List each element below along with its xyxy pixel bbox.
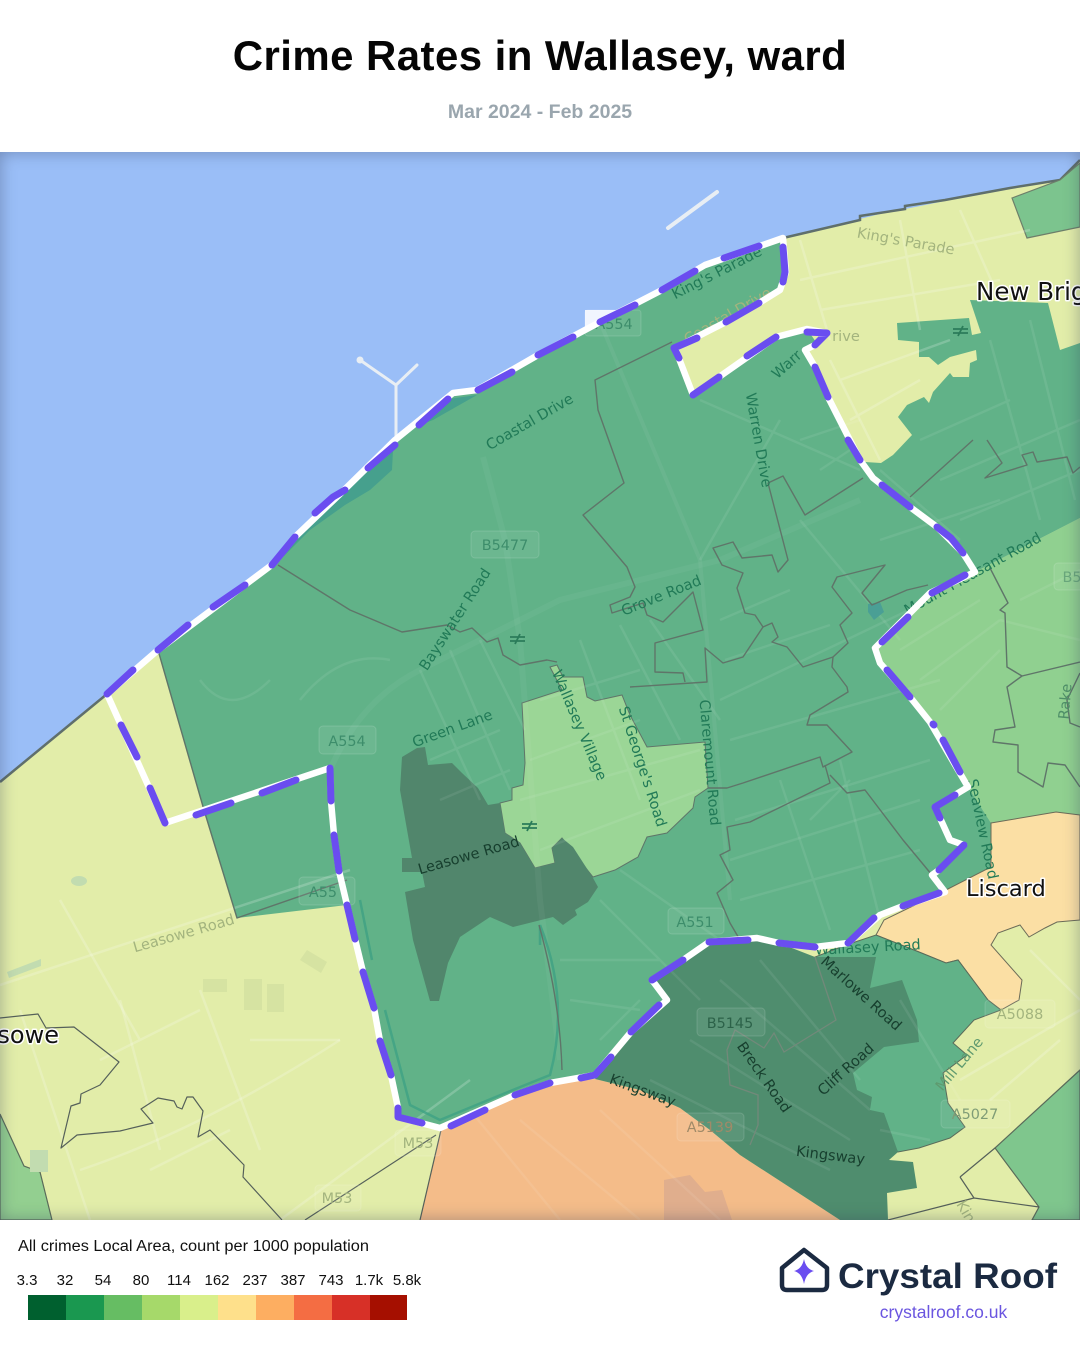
area: dark green south ward [595,938,919,1220]
road labels: Coastal Drive [681,284,774,348]
area: green south of Liscard [815,935,1001,1152]
place labels: Liscard [966,876,1046,902]
legend tick labels: 387 [280,1272,306,1289]
legend tick labels: 32 [57,1272,73,1289]
teal foreshore strips [277,395,884,620]
road labels: Rake [1055,683,1076,720]
road labels: Grove Road [619,572,704,620]
legend [17,1238,422,1320]
road labels [131,225,1076,1234]
road number badges: M53 [403,1136,433,1152]
road labels: Kingsway [607,1071,678,1111]
ward boundary dashed outline [107,238,975,1128]
road number badges: A5088 [997,1007,1043,1023]
icon: house with star [782,1250,827,1290]
road number badges: A554 [328,734,366,750]
land: low crime yellow areas [0,160,1080,1220]
legend tick labels: 743 [318,1272,344,1289]
area: light green east of ward [875,518,1080,823]
road labels: Mount Pleasant Road [901,529,1044,619]
road labels: King's Parade [669,243,765,303]
map panel [0,152,1080,1220]
legend tick labels: 114 [167,1272,191,1289]
legend tick labels: 5.8k [393,1272,422,1289]
streets network [0,210,1080,1220]
rail station icons [510,326,968,831]
sea [0,152,1080,1220]
road number badges: A55 [309,885,337,901]
road number badges: B5477 [482,538,528,554]
legend tick labels [17,1272,422,1289]
road number badges: A554 [595,317,633,333]
road labels: rive [832,328,860,345]
road labels: Kingsway [795,1143,866,1168]
road labels: Seaview Road [963,777,1001,881]
area boundaries [158,342,1080,1070]
legend tick labels: 80 [133,1272,149,1289]
area: main green region of ward and north east [158,238,1080,1128]
road number badges: M53 [322,1191,352,1207]
road labels: Bayswater Road [416,565,495,674]
road labels: Marlowe Road [817,953,905,1034]
area: top right park green [1012,163,1080,238]
road labels: Wallasey Road [814,936,921,959]
area: bottom right green [995,1070,1080,1220]
park water channel [360,900,558,1120]
legend tick labels: 3.3 [17,1272,37,1289]
map edge vignette [0,152,1080,1220]
coastline [0,160,1080,782]
area: orange high crime [420,1079,840,1220]
road labels: Warren Drive [742,392,775,489]
road number badges: A5139 [687,1120,733,1136]
area: dark green central [400,747,598,1001]
road labels: Green Lane [410,706,495,751]
road number badges [299,310,1080,1211]
road labels: Leasowe Road [416,833,521,878]
road number badges: A551 [676,915,714,931]
boundary inside dark south area [727,957,836,1145]
area: tan Liscard high crime [876,812,1080,1010]
road labels: Mill Lane [932,1034,987,1094]
small water and field features [7,876,327,1172]
road labels: Claremount Road [696,699,723,826]
road labels: Warr [769,347,805,382]
road labels: Breck Road [733,1039,794,1116]
boundaries west of ward [0,1014,1039,1220]
road labels: Coastal Drive [483,390,576,454]
patch inside orange area [664,1175,732,1220]
legend tick labels: 1.7k [355,1272,384,1289]
logo: Crystal Roof [780,1248,1058,1322]
structure in the sea [357,192,717,438]
legend tick labels: 162 [204,1272,230,1289]
road labels: Leasowe Road [131,911,236,956]
road labels: Cliff Road [814,1040,878,1099]
road number badges: B5145 [707,1016,753,1032]
subtitle: date range: Mar 2024 - Feb 2025 [448,101,632,123]
legend title: All crimes Local Area, count per 1000 population [18,1238,369,1255]
logo wordmark: Crystal Roof [838,1257,1057,1296]
legend tick labels: 237 [242,1272,268,1289]
legend tick labels: 54 [95,1272,111,1289]
website url: crystalroof.co.uk [880,1302,1007,1322]
road number badges: A5027 [952,1107,998,1123]
title: Crime Rates in Wallasey, ward [233,32,847,79]
legend colour scale [28,1295,407,1320]
road labels: St George's Road [615,704,670,829]
area: light green Wallasey Village [500,665,708,877]
road labels: King's Parade [856,225,956,259]
area: bottom left green [0,1114,52,1220]
place labels [0,277,1080,1049]
road labels: Wallasey Village [548,667,610,783]
